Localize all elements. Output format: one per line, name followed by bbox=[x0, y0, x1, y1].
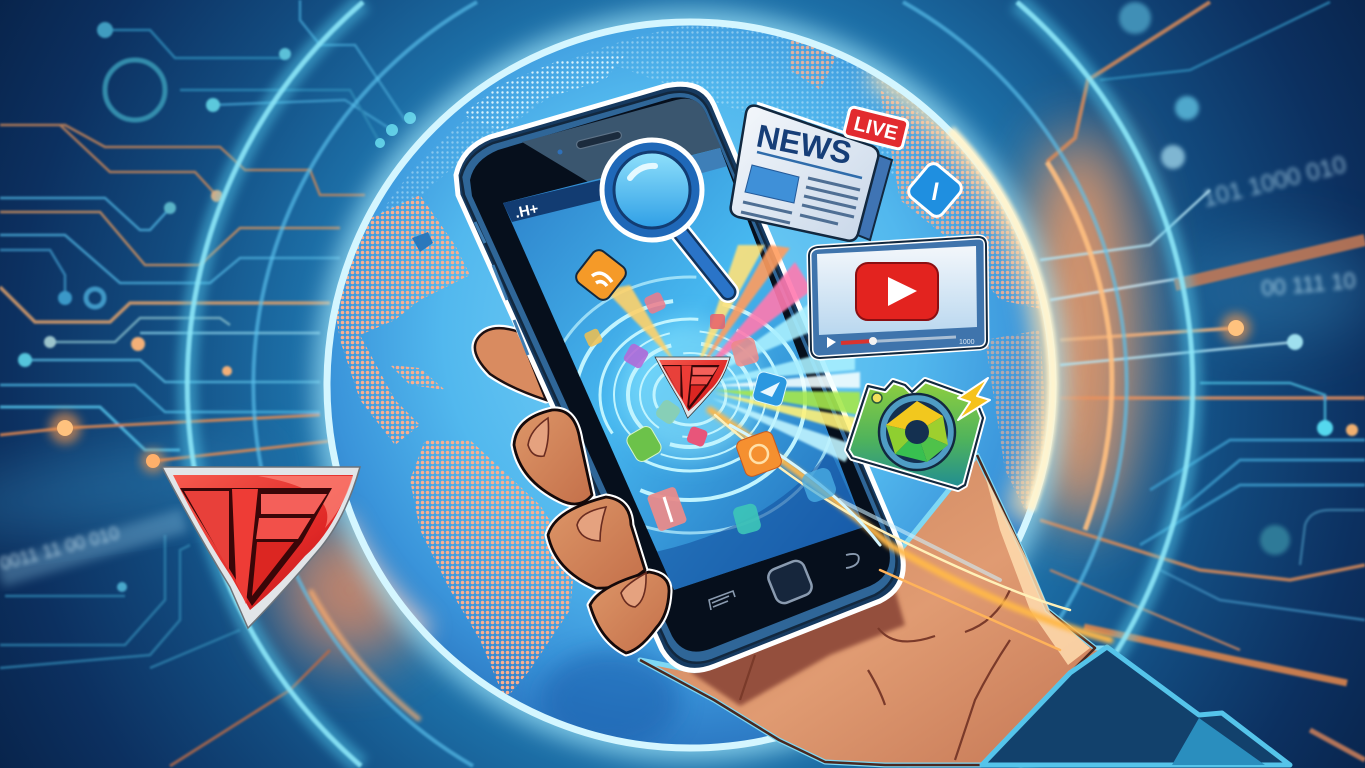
binary text streams bbox=[0, 151, 1357, 575]
binary text streams: 101 1000 010 bbox=[1200, 151, 1349, 213]
magnifying glass bbox=[602, 140, 728, 292]
light streams bbox=[605, 245, 1110, 650]
news card bbox=[731, 103, 909, 241]
sea dot texture bbox=[381, 26, 984, 218]
continent: Caribbean bbox=[390, 365, 445, 390]
palm wrinkles bbox=[740, 590, 1010, 760]
phone: .H+ bbox=[513, 200, 540, 222]
outer rings bbox=[187, 2, 1193, 766]
screen app icons bbox=[573, 247, 838, 536]
continent: South America bbox=[410, 440, 575, 700]
status bar bbox=[503, 180, 610, 222]
circuit lines: left bbox=[0, 0, 405, 766]
flash bolt bbox=[958, 378, 990, 420]
binary text streams: 00 111 10 bbox=[1260, 268, 1357, 301]
phone top bezel slate bbox=[522, 99, 722, 183]
home button bbox=[766, 558, 814, 606]
live badge bbox=[843, 106, 909, 150]
video player card bbox=[809, 237, 987, 358]
background glows bbox=[0, 130, 1365, 660]
icon: wifi tile bbox=[573, 247, 629, 303]
logo: red shield emblem bbox=[162, 467, 360, 628]
globe bbox=[325, 20, 1061, 750]
phone bbox=[456, 84, 903, 670]
back icon bbox=[846, 554, 859, 568]
menu icon bbox=[709, 591, 735, 610]
news card: NEWS bbox=[754, 118, 855, 171]
globe glow bbox=[314, 9, 1066, 761]
continent: northern land bbox=[462, 55, 625, 130]
screen glow bbox=[620, 320, 760, 460]
side buttons bbox=[475, 222, 528, 355]
fingers bbox=[514, 410, 669, 653]
finger behind phone bbox=[475, 328, 546, 400]
center logo bbox=[655, 357, 730, 418]
continent: North America bbox=[330, 195, 470, 445]
palm shadow bbox=[690, 590, 905, 706]
sleeve cuff bbox=[982, 647, 1290, 765]
palm rim light bbox=[985, 475, 1090, 665]
front camera bbox=[558, 150, 562, 154]
small blue diamond icon bbox=[905, 160, 965, 220]
phone screen bbox=[503, 148, 864, 590]
live badge: LIVE bbox=[852, 113, 900, 145]
circuit lines: right bbox=[1040, 2, 1365, 760]
camera icon bbox=[847, 378, 990, 489]
small blue diamond icon: l bbox=[932, 179, 940, 206]
deep sea bbox=[540, 650, 680, 750]
data glow dots bbox=[18, 2, 1358, 592]
screen swirl bbox=[545, 277, 835, 533]
speaker bbox=[576, 131, 622, 149]
binary text streams: 0011 11 00 010 bbox=[0, 523, 121, 574]
continent: eastern land bbox=[790, 40, 836, 89]
warm rim bbox=[880, 60, 1061, 520]
hand: palm and wrist bbox=[640, 455, 1107, 765]
darker lower screen bbox=[657, 453, 862, 590]
video player card: 1000 bbox=[959, 339, 975, 346]
